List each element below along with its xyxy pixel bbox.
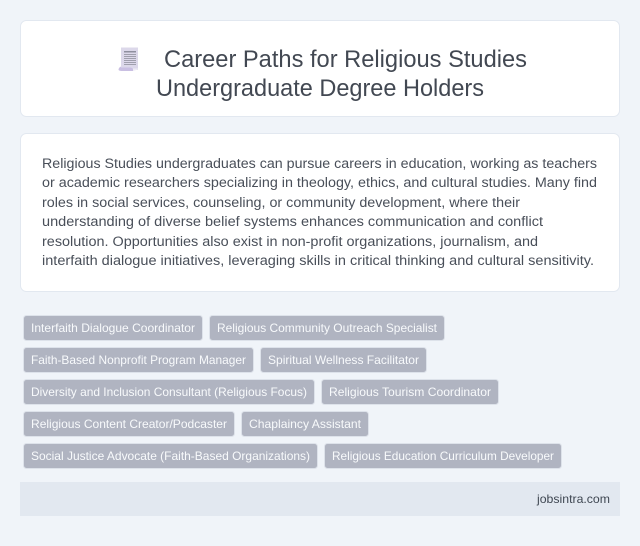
title: Undergraduate Degree Holders — [156, 75, 484, 102]
summary paragraph: understanding of diverse belief systems enhances communication and conflict — [42, 214, 543, 230]
tag: Interfaith Dialogue Coordinator: Interfaith Dialogue Coordinator — [31, 321, 195, 335]
summary paragraph: resolution. Opportunities also exist in non-profit organizations, journalism, and — [42, 234, 538, 250]
summary paragraph: Religious Studies undergraduates can pursue careers in education, working as teachers — [42, 156, 597, 172]
tag: Faith-Based Nonprofit Program Manager — [24, 348, 254, 372]
tag: Religious Community Outreach Specialist — [210, 316, 444, 340]
tag: Chaplaincy Assistant — [242, 412, 368, 436]
panel: summary text — [20, 134, 620, 292]
title: Career Paths for Religious Studies — [164, 46, 527, 73]
career tags — [24, 316, 562, 468]
tag: Religious Community Outreach Specialist: Religious Community Outreach Specialist — [217, 321, 438, 335]
tag: Spiritual Wellness Facilitator: Spiritual Wellness Facilitator — [268, 353, 419, 367]
header panel — [20, 20, 620, 116]
tag: Diversity and Inclusion Consultant (Religious Focus) — [24, 380, 314, 404]
summary paragraph — [42, 156, 597, 269]
summary paragraph: interfaith dialogue initiatives, leveraging skills in critical thinking and cultural sensitivity. — [42, 253, 594, 269]
summary paragraph: roles in social services, counseling, or community development, where their — [42, 195, 520, 211]
tag: Diversity and Inclusion Consultant (Religious Focus): Diversity and Inclusion Consultant (Religious Focus) — [31, 385, 307, 399]
tag: Social Justice Advocate (Faith-Based Organizations) — [24, 444, 318, 468]
summary paragraph: or academic researchers specializing in theology, ethics, and cultural studies. Many find — [42, 175, 597, 191]
tag: Interfaith Dialogue Coordinator — [24, 316, 202, 340]
tag: Religious Tourism Coordinator: Religious Tourism Coordinator — [329, 385, 491, 399]
title — [156, 46, 527, 102]
tag: Religious Education Curriculum Developer — [324, 444, 562, 468]
tag: Faith-Based Nonprofit Program Manager: Faith-Based Nonprofit Program Manager — [31, 353, 246, 367]
icon: scroll document — [118, 48, 138, 71]
tag: Religious Education Curriculum Developer: Religious Education Curriculum Developer — [332, 449, 554, 463]
footer bar — [20, 482, 620, 516]
tag: Religious Tourism Coordinator — [322, 380, 498, 404]
tag: Religious Content Creator/Podcaster: Religious Content Creator/Podcaster — [31, 417, 227, 431]
tag: Chaplaincy Assistant: Chaplaincy Assistant — [249, 417, 362, 431]
tag: Social Justice Advocate (Faith-Based Organizations): Social Justice Advocate (Faith-Based Organizations) — [31, 449, 310, 463]
tag: Religious Content Creator/Podcaster — [24, 412, 234, 436]
footer source text: jobsintra.com — [536, 492, 610, 506]
tag: Spiritual Wellness Facilitator — [260, 348, 426, 372]
